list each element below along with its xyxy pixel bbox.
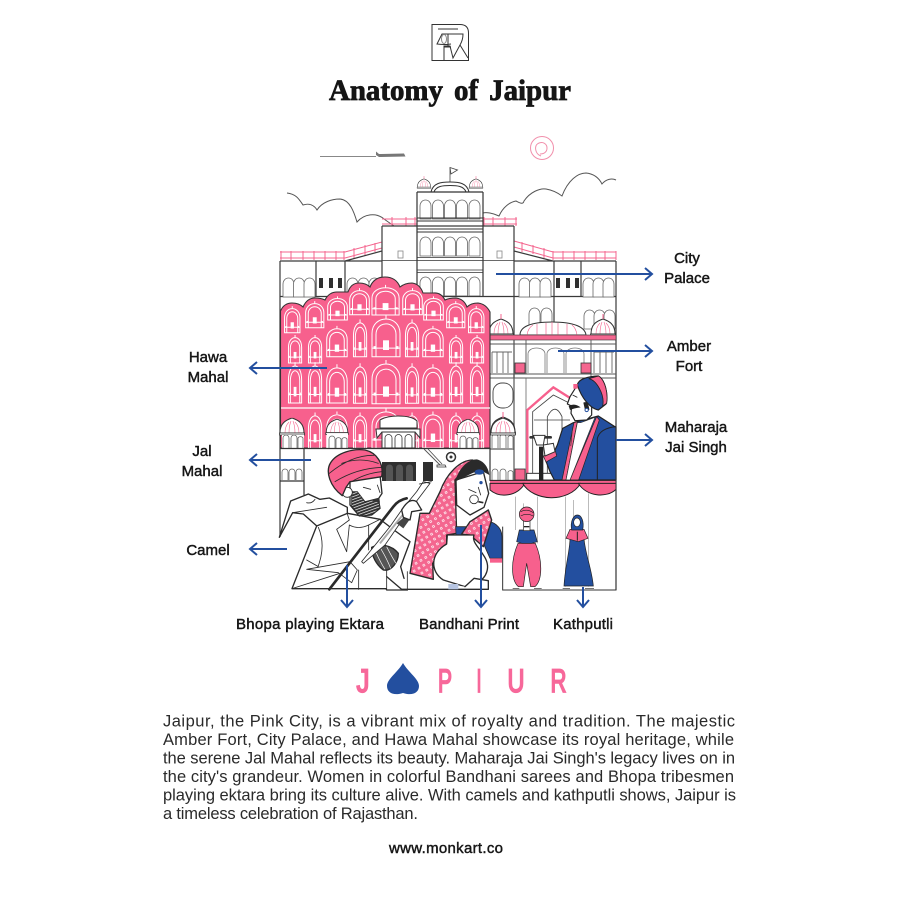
- label: Amber Fort: Fort: [676, 358, 703, 375]
- arrow: City Palace: [496, 268, 652, 280]
- label: Hawa Mahal: Mahal: [188, 369, 228, 386]
- neck and face: [342, 475, 382, 516]
- Bandhani sari: [410, 460, 473, 579]
- Jaipur wordmark: R: [550, 663, 566, 699]
- top window row: [285, 285, 484, 333]
- puppet: man: [513, 507, 542, 588]
- staff: [531, 435, 551, 480]
- title: Anatomy of Jaipur: [329, 74, 571, 107]
- clouds: [287, 173, 616, 226]
- sari shoulder: [462, 510, 492, 547]
- arrow: Camel: [250, 543, 287, 555]
- arrow: Maharaja Jai Singh: [616, 434, 652, 446]
- arrow: Bandhani Print: [475, 525, 487, 607]
- label: Camel: Camel: [186, 542, 230, 559]
- label: Jal Mahal: Jal: [192, 443, 212, 460]
- label: Bandhani Print: Bandhani Print: [419, 616, 520, 633]
- description paragraph: the serene Jal Mahal reflects its beauty. Maharaja Jai Singh's legacy lives on in: [163, 750, 735, 768]
- blue blouse: [456, 521, 502, 558]
- description paragraph: Amber Fort, City Palace, and Hawa Mahal showcase its royal heritage, while: [163, 731, 734, 749]
- side wing windows: [283, 278, 614, 297]
- puppet stage frame: [503, 427, 616, 590]
- icon: pink sun: [530, 136, 554, 160]
- hand on string: [402, 500, 422, 520]
- description paragraph: Jaipur, the Pink City, is a vibrant mix of royalty and tradition. The majestic: [163, 712, 735, 730]
- description paragraph: a timeless celebration of Rajasthan.: [163, 805, 418, 823]
- arrow: Jal Mahal: [250, 454, 311, 466]
- panel: City Palace: [280, 168, 616, 590]
- side wings: [280, 226, 616, 590]
- website: www.monkart.co: [388, 840, 503, 857]
- arrow: Amber Fort: [558, 345, 652, 357]
- pink roof rails: [280, 217, 616, 260]
- arched niche: [527, 387, 571, 480]
- description paragraph: [163, 712, 736, 823]
- central tower: [417, 168, 483, 296]
- arrow: Hawa Mahal: [250, 362, 327, 374]
- gourd of ektara: [372, 545, 398, 570]
- label: Bhopa playing Ektara: Bhopa playing Ektara: [236, 616, 385, 633]
- camel: [279, 494, 347, 537]
- ektara: [329, 482, 431, 589]
- icon: blue drop: [387, 663, 419, 694]
- pink turban: [328, 450, 382, 496]
- fourth window row: [308, 408, 484, 448]
- Jaipur wordmark: I: [476, 663, 482, 699]
- label: Kathputli: Kathputli: [553, 616, 613, 633]
- third window row: [288, 360, 484, 404]
- label: Maharaja Jai Singh: Jai Singh: [665, 439, 727, 456]
- label: Jal Mahal: Mahal: [182, 463, 222, 480]
- coat: [543, 416, 616, 480]
- maharaja turban: [573, 376, 607, 410]
- Jaipur wordmark: P: [438, 663, 452, 699]
- puppet: woman: [563, 515, 594, 588]
- Jaipur wordmark: U: [508, 663, 524, 699]
- arrow: Kathputli: [577, 587, 589, 607]
- arrow: Bhopa playing Ektara: [341, 565, 353, 607]
- description paragraph: playing ektara bring its culture alive. With camels and kathputli shows, Jaipur is: [163, 786, 736, 804]
- label: Amber Fort: Amber: [667, 338, 711, 355]
- logo: [432, 24, 468, 60]
- woman's face: [455, 459, 489, 515]
- bhopa body: [292, 513, 410, 590]
- pink swags: [490, 480, 616, 498]
- panel: Bhopa, camel and Bandhani woman: [279, 450, 502, 590]
- icon: airplane and trail: [320, 152, 406, 157]
- label: City Palace: City: [674, 250, 700, 267]
- central chhatri: [376, 416, 420, 448]
- panel: Hawa Mahal: [280, 277, 490, 448]
- Jaipur wordmark: J: [356, 663, 370, 699]
- panel: Amber Fort: [488, 308, 616, 480]
- panel: Jal Mahal: [280, 413, 516, 495]
- second window row: [288, 315, 484, 363]
- woman's lower hand: [387, 577, 488, 589]
- label: City Palace: Palace: [664, 270, 710, 287]
- head: [567, 385, 592, 421]
- label: Hawa Mahal: Hawa: [189, 349, 227, 366]
- description paragraph: the city's grandeur. Women in colorful Bandhani sarees and Bhopa tribesmen: [163, 768, 734, 786]
- panel: Maharaja Jai Singh: [490, 376, 616, 590]
- pot: [434, 535, 488, 587]
- Jaipur wordmark: [356, 663, 566, 699]
- label: Maharaja Jai Singh: Maharaja: [665, 419, 727, 436]
